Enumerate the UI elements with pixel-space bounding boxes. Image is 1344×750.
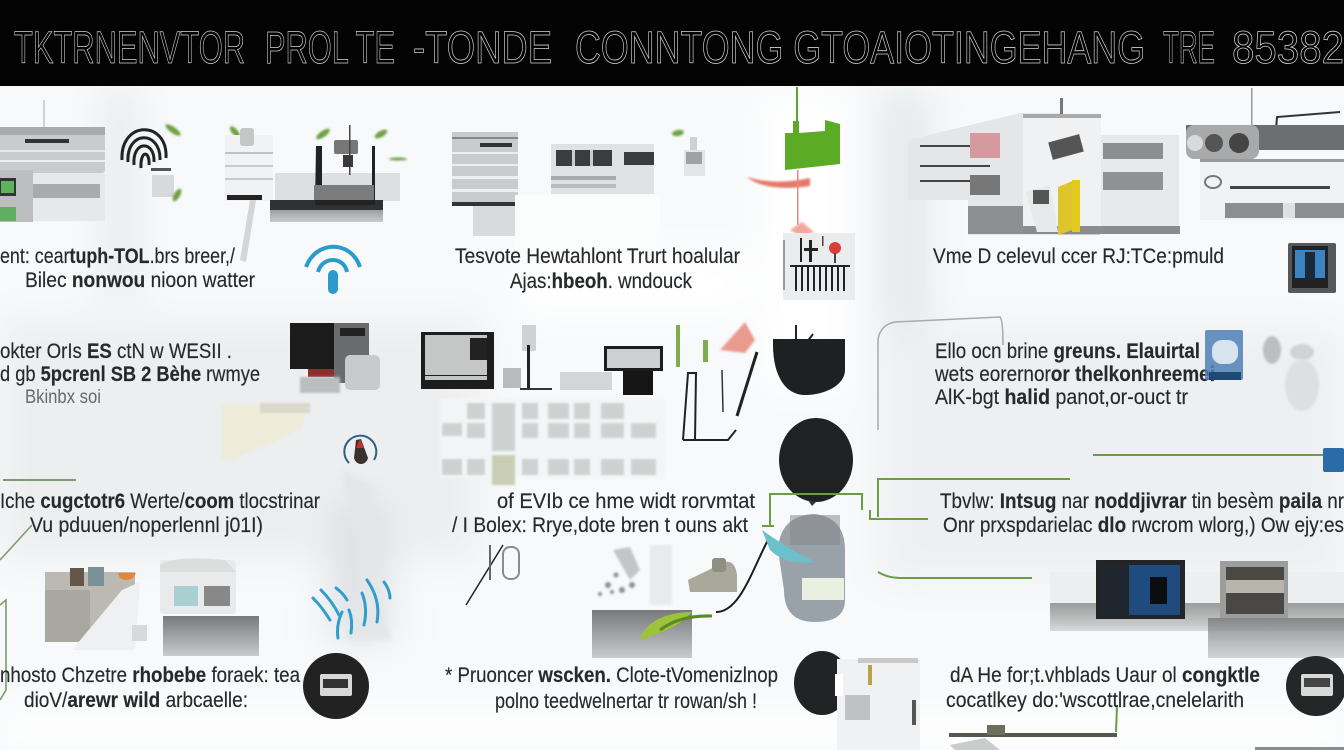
text: top row right: Vme D celevul ccer RJ:TCe:pmuld [933,245,1224,268]
text: middle row right: Ello ocn brine greuns. Elauirtal [935,340,1200,363]
machines: bottom right tablet and laptop [1050,560,1344,658]
text: bottom row right [946,664,1260,712]
text: top row left: ent: ceartuph-TOL.brs breer,/ [0,245,235,268]
text: lower row centre: of EVIb ce hme widt rorvmtat [497,490,755,513]
scatter: small parts [598,545,672,605]
icon: green hanging tag with red swoosh [747,87,840,237]
machine: benchtop printer [240,125,400,262]
title text: PROL TE [265,22,395,73]
text: middle row right: AlK-bgt halid panot,or-ouct tr [935,386,1188,409]
device: tweezers and green clips [676,322,757,440]
title text [14,22,1344,73]
machine: striped cabinet [225,128,273,201]
text: middle row right: wets eorernoror thelkonhreemei [934,363,1215,386]
text: bottom row left: nhosto Chzetre rhobebe foraek: tea [0,664,300,687]
text: middle row left: d gb 5pcrenl SB 2 Bèhe rwmye [0,363,260,386]
text: lower row centre [452,490,755,537]
machines: bottom left bench [45,558,259,656]
title banner [0,0,1344,86]
text: top row centre: Tesvote Hewtahlont Trurt hoalular [455,245,740,268]
text: top row centre: Ajas:hbeoh. wndouck [510,270,692,293]
icon: ringed red pin [344,436,376,464]
icon: black half circle with white cabinet [794,651,920,750]
text: bottom row centre: * Pruoncer wscken. Clote-tVomenizlnop [445,664,778,687]
text: top row left [0,245,255,292]
text: middle row right [934,340,1215,409]
text: middle row left: okter OrIs ES ctN w WESII . [0,340,232,363]
text: lower row left [0,490,320,537]
icon: black circle with chip [303,653,369,719]
text: bottom row centre [445,664,778,713]
machine: top right gauge console [1186,88,1344,220]
text: lower row right [940,490,1344,537]
text: bottom row right: cocatlkey do:'wscottlrae,cnelelarith [946,689,1244,712]
title text: TRE [1163,22,1215,73]
text: top row left: Bilec nonwou nioon watter [25,269,255,292]
icon: blue wifi signal [306,247,360,294]
shapes: vertical black and grey blobs [762,325,853,622]
title text: CONNTONG GTOAIOTINGEHANG [575,22,1145,73]
text: lower row centre: / I Bolex: Rrye,dote bren t ouns akt [452,514,748,537]
text: bottom row centre: polno teedwelnertar tr rowan/sh ! [495,690,757,713]
text: lower row left: Vu pduuen/noperlennl j01I) [30,514,263,537]
connectors: green lines centre [762,455,1325,732]
title text: -TONDE [413,22,552,73]
lab devices: framed monitor, stand, screen [421,325,663,395]
computer: black monitor and tower [290,323,380,393]
icon: blue device [1288,243,1336,293]
machine: small wall unit [684,137,705,176]
shelf: beige box [222,403,310,460]
sketch: thin black stand marks [466,545,519,605]
shelf: white grid cabinet [440,398,665,485]
green connector left [0,480,76,700]
device: blue unit and faded icons right [1205,330,1344,472]
text: bottom row right: dA He for;t.vhblads Uaur ol congktle [950,664,1260,687]
icon: black circle with chip right [1286,656,1344,716]
icon: blue signal waves [313,580,390,638]
text: bottom row left [0,664,300,712]
icon: fingerprint arcs [122,130,174,197]
title text: TKTRNENVTOR [14,22,245,73]
shape: soft white-grey figure [342,470,392,640]
machine: dark bench with green leaf [592,540,768,658]
text: bottom row left: dioV/arewr wild arbcaelle: [24,689,248,712]
machine: striped unit with windows [452,132,660,250]
panel: gauge and bars [783,233,855,300]
machine: large white system with yellow door [908,98,1180,235]
text: middle row left: Bkinbx soi [25,387,101,408]
text: lower row left: Iche cugctotr6 Werte/coom tlocstrinar [0,490,320,513]
machine: top left equipment [0,100,105,222]
text: lower row right: Tbvlw: Intsug nar noddjivrar tin besèm paila nr [940,490,1344,513]
leaves: green accents [164,122,684,203]
text: top row centre [455,245,740,293]
text: middle row left [0,340,260,408]
panel: outlined frame [878,317,1003,430]
machine: bottom tool on rail [949,725,1344,750]
